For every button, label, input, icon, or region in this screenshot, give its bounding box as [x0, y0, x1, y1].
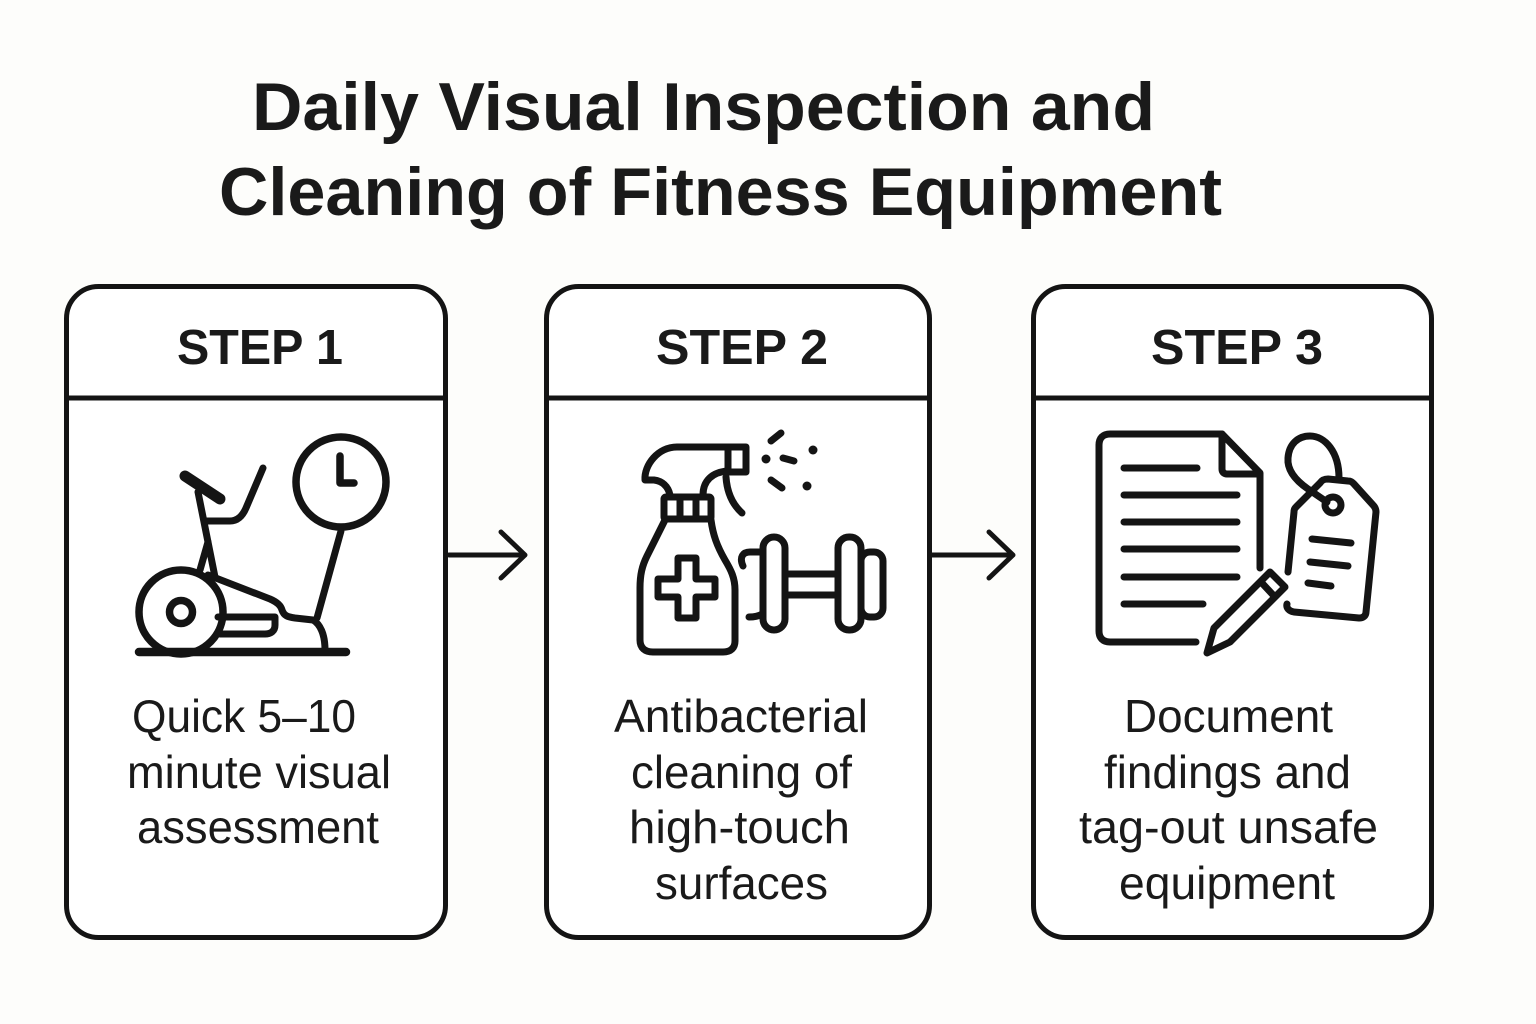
- text: step 3 description: [1079, 690, 1378, 909]
- text: step 2 description: [614, 690, 868, 909]
- text: step 1 description: [127, 690, 391, 853]
- text: step 2 description: Antibacterial: [614, 690, 868, 742]
- panel: step 3: [1033, 286, 1432, 938]
- text: step 2 description: surfaces: [655, 857, 828, 909]
- text: step 1 description: Quick 5–10: [132, 690, 356, 742]
- arrow: step 1 to step 2: [449, 532, 525, 578]
- arrow: step 2 to step 3: [932, 532, 1013, 578]
- title: Cleaning of Fitness Equipment: [219, 154, 1222, 230]
- heading: step 3: STEP 3: [1151, 321, 1323, 375]
- text: step 2 description: cleaning of: [631, 746, 852, 798]
- panel: step 2: [546, 286, 930, 938]
- text: step 1 description: minute visual: [127, 746, 391, 798]
- text: step 3 description: equipment: [1119, 857, 1335, 909]
- icon: document, tag and pencil: [1099, 434, 1376, 653]
- title: Daily Visual Inspection and: [252, 69, 1155, 145]
- text: step 3 description: Document: [1124, 690, 1333, 742]
- text: step 3 description: findings and: [1104, 746, 1351, 798]
- panel: step 1: [66, 286, 446, 938]
- heading: step 1: STEP 1: [177, 321, 343, 375]
- icon: exercise bike with clock: [139, 437, 386, 654]
- heading: step 2: STEP 2: [656, 321, 828, 375]
- text: step 3 description: tag-out unsafe: [1079, 801, 1378, 853]
- title: [219, 69, 1222, 230]
- text: step 2 description: high-touch: [629, 801, 850, 853]
- icon: spray bottle and dumbbell: [640, 433, 883, 652]
- text: step 1 description: assessment: [137, 801, 379, 853]
